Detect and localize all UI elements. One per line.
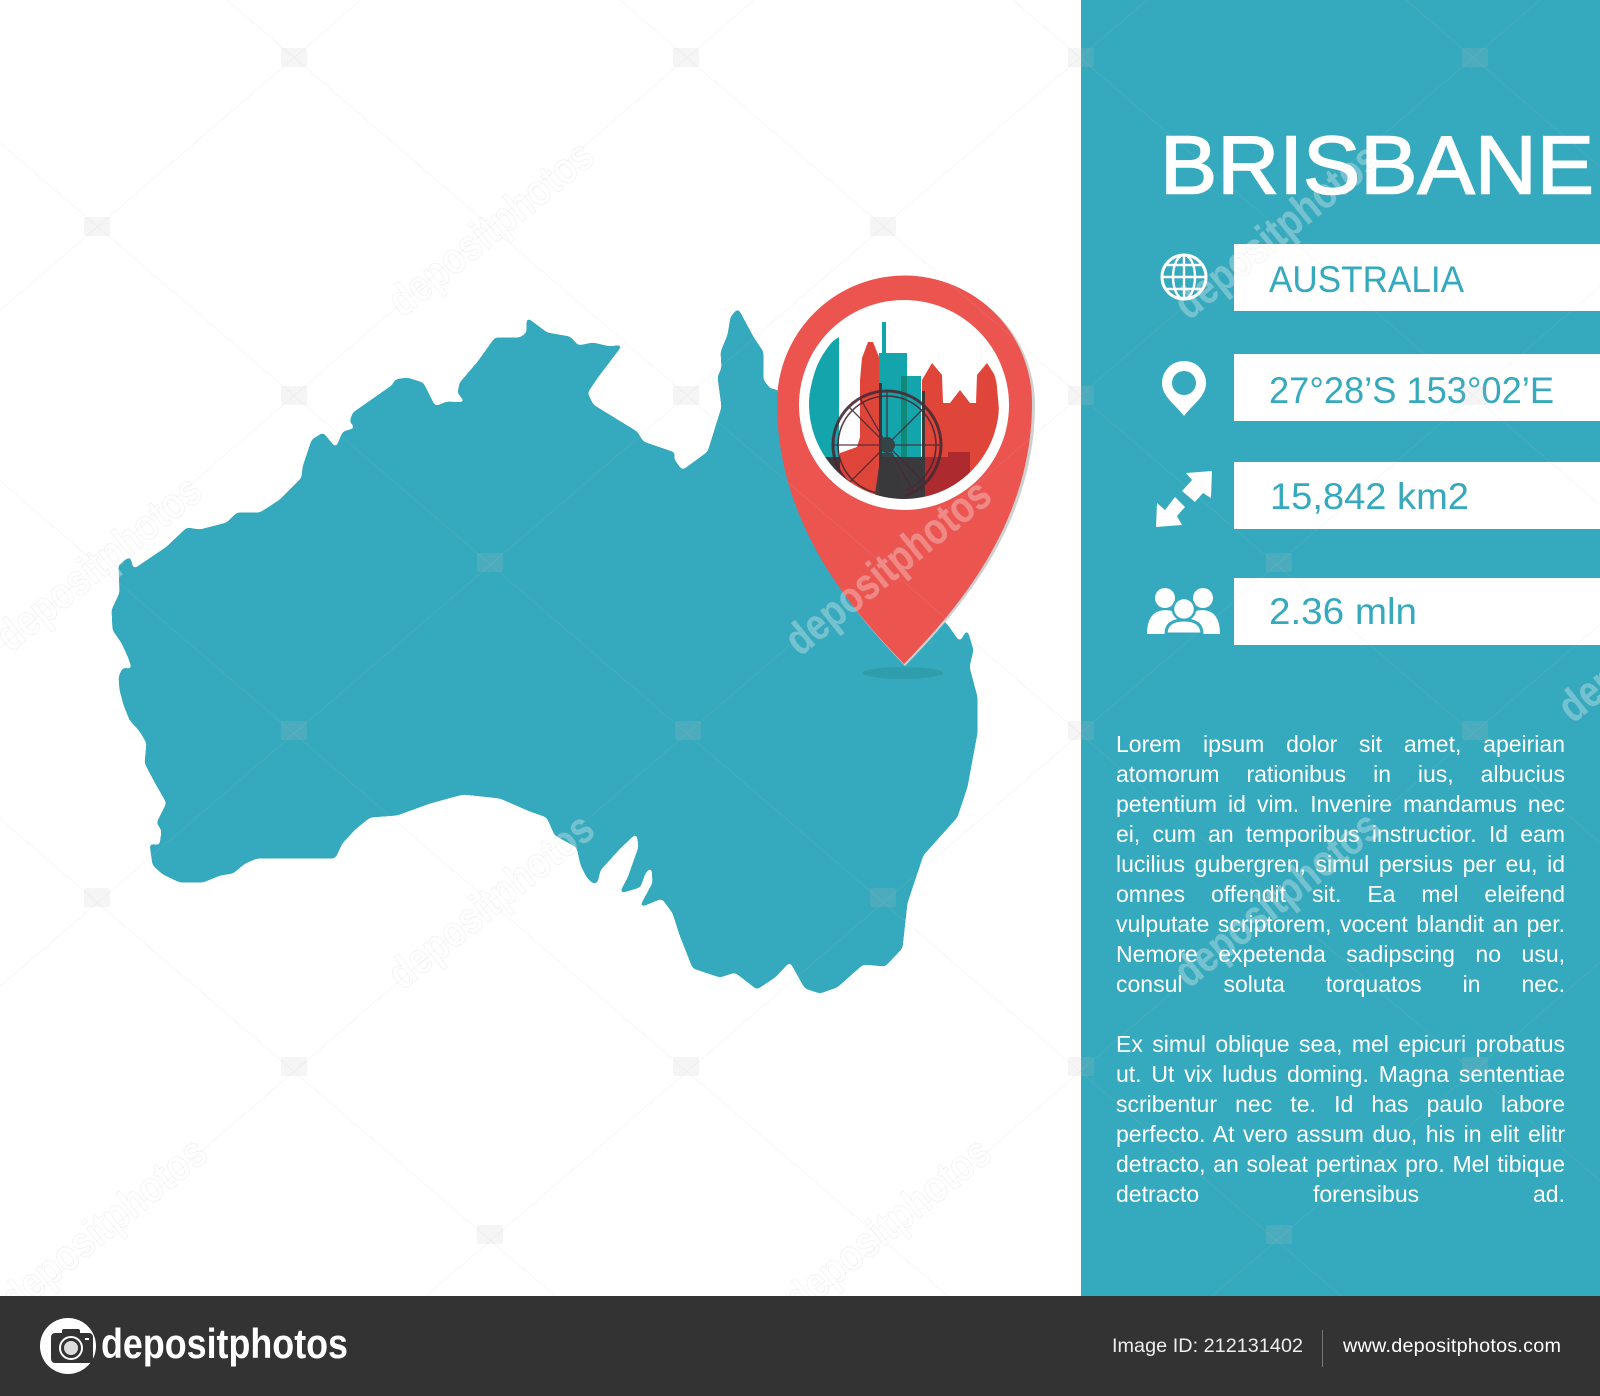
icon: depositphotos camera logo	[40, 1318, 96, 1374]
coordinates bar	[1234, 354, 1600, 421]
watermarks: depositphotos	[378, 130, 604, 326]
location pin with skyline	[777, 276, 1035, 679]
area bar	[1234, 462, 1600, 529]
area bar: 15,842 km2	[1270, 476, 1469, 517]
description paragraph one: vulputate scriptorem, vocent blandit an per.	[1116, 911, 1565, 937]
description paragraph two	[1116, 1031, 1565, 1207]
watermarks: depositphotos	[775, 469, 1001, 665]
population bar: 2.36 mln	[1269, 591, 1417, 632]
icon: area arrows	[1156, 471, 1212, 527]
description paragraph one: atomorum rationibus in ius, albucius	[1116, 761, 1565, 787]
description paragraph two: perfecto. At vero assum duo, his in elit elitr	[1116, 1121, 1565, 1147]
watermarks: depositphotos	[1164, 801, 1390, 997]
description paragraph one	[1116, 731, 1565, 997]
description paragraph two: ut. Ut vix ludus doming. Magna sententiae	[1116, 1061, 1565, 1087]
image id: Image ID: 212131402	[1112, 1335, 1303, 1357]
population bar	[1234, 578, 1600, 645]
title: BRISBANE	[1160, 118, 1594, 212]
description paragraph one: Lorem ipsum dolor sit amet, apeirian	[1116, 731, 1565, 757]
country bar: AUSTRALIA	[1269, 259, 1464, 300]
pin ground shadow	[863, 667, 943, 679]
watermarks: depositphotos	[378, 803, 604, 999]
brand wordmark: depositphotos	[101, 1320, 348, 1367]
map of Australia	[112, 309, 977, 993]
description paragraph two: detracto forensibus ad.	[1116, 1181, 1565, 1207]
pin body	[777, 276, 1032, 664]
description paragraph one: lucilius gubergren, simul persius per eu, id	[1116, 851, 1565, 877]
description paragraph one: petentium id vim. Invenire mandamus nec	[1116, 791, 1565, 817]
description paragraph two: detracto, an soleat pertinax pro. Mel tibique	[1116, 1151, 1565, 1177]
description paragraph two: Ex simul oblique sea, mel epicuri probatus	[1116, 1031, 1565, 1057]
description paragraph one: ei, cum an temporibus instructior. Id eam	[1116, 821, 1565, 847]
pin white circle	[799, 300, 1009, 510]
country bar	[1234, 244, 1600, 311]
description paragraph one: omnes offendit sit. Ea mel eleifend	[1116, 881, 1565, 907]
pin side shadow	[780, 278, 1035, 666]
icon: globe	[1162, 255, 1206, 299]
ferris wheel	[833, 391, 941, 500]
coordinates bar: 27°28’S 153°02’E	[1269, 370, 1554, 411]
city skyline	[808, 322, 1000, 500]
icon: people	[1147, 588, 1220, 634]
description paragraph two: scribentur nec te. Id has paulo labore	[1116, 1091, 1565, 1117]
description paragraph one: consul soluta torquatos in nec.	[1116, 971, 1565, 997]
icon: location marker	[1162, 361, 1206, 416]
footer bar	[0, 1296, 1600, 1396]
website: www.depositphotos.com	[1342, 1335, 1561, 1357]
description paragraph one: Nemore expetenda sadipscing no usu,	[1116, 941, 1565, 967]
panel: city facts	[1081, 0, 1600, 1296]
watermarks: depositphotos	[1164, 133, 1390, 329]
